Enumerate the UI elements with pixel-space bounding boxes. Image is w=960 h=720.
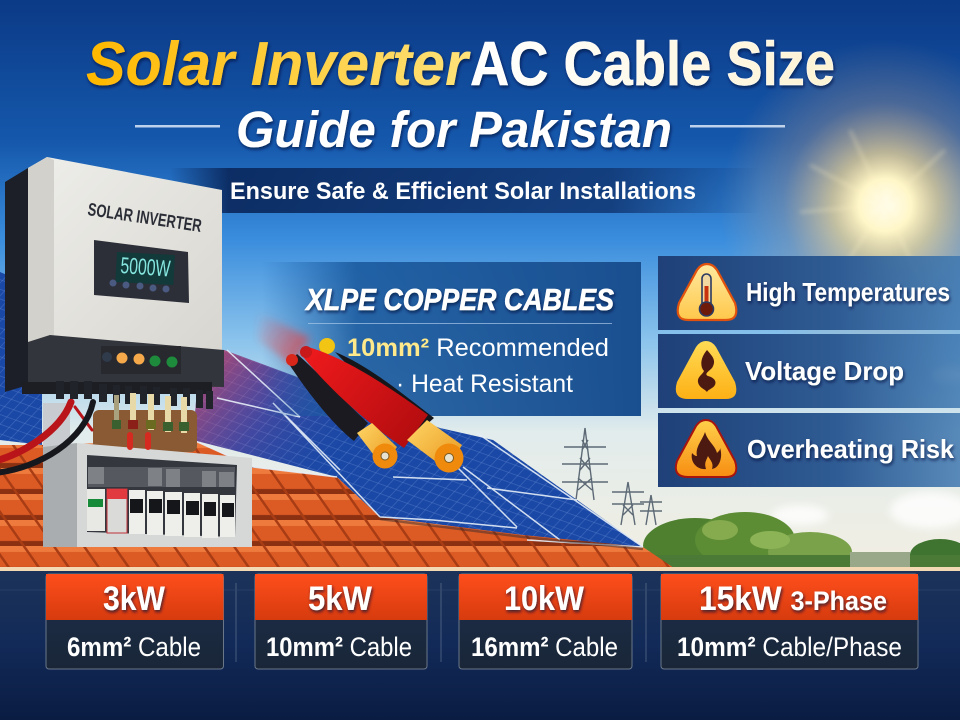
card: 5kW — [255, 574, 427, 669]
breaker panel — [43, 443, 252, 547]
capacity cards — [46, 574, 918, 669]
icon: fire warning — [676, 420, 736, 477]
card: 3kW: 3kW — [103, 580, 166, 618]
card: 10kW: 16mm² Cable — [471, 632, 618, 662]
title: AC Cable Size — [470, 30, 835, 99]
panel: XLPE copper cables — [262, 262, 641, 416]
sky background — [0, 0, 960, 570]
icon: voltage warning — [676, 341, 736, 399]
power pylons — [562, 428, 662, 525]
inverter side — [5, 168, 28, 392]
icon: XLPE cable pair — [258, 312, 464, 472]
card: 15kW 3-phase: 10mm² Cable/Phase — [677, 632, 902, 662]
tagline banner: Ensure Safe & Efficient Solar Installations — [230, 178, 696, 205]
card: 10kW: 10kW — [504, 580, 585, 618]
risk: overheating: Overheating Risk — [747, 434, 955, 464]
display: 5000W — [120, 252, 172, 281]
panel: risks — [658, 256, 960, 487]
risk: high temperatures — [658, 256, 960, 330]
heading: XLPE: XLPE COPPER CABLES — [304, 282, 614, 317]
card: 3kW — [46, 574, 224, 669]
icon: thermometer warning — [678, 264, 736, 320]
card: 15kW 3-phase: 15kW 3-Phase — [699, 580, 887, 618]
breakers — [87, 489, 235, 538]
inverter label: SOLAR INVERTER — [86, 199, 203, 236]
spec: recommended size: 10mm² Recommended — [347, 334, 609, 362]
title — [86, 30, 835, 99]
subtitle: Guide for Pakistan — [236, 101, 672, 158]
risk: overheating — [658, 413, 960, 487]
inverter face — [28, 157, 222, 350]
clouds — [772, 367, 960, 528]
roof with tiles — [0, 440, 680, 572]
solar panels — [0, 272, 643, 549]
terminals and fuses — [22, 381, 213, 433]
risk: voltage drop: Voltage Drop — [745, 356, 904, 386]
AC cables to breaker — [0, 402, 148, 473]
ground band — [0, 570, 960, 720]
risk: voltage drop — [658, 334, 960, 408]
control strip — [28, 335, 224, 387]
card: 5kW: 5kW — [308, 580, 373, 618]
card: 3kW: 6mm² Cable — [67, 632, 201, 662]
trees — [640, 512, 960, 574]
breaker box backing and conduit — [43, 403, 197, 473]
card: 15kW 3-phase — [661, 574, 918, 669]
card: 5kW: 10mm² Cable — [266, 632, 412, 662]
solar inverter — [5, 157, 224, 433]
title: Solar Inverter — [86, 30, 471, 99]
sun — [720, 40, 960, 370]
spec: heat resistant: · Heat Resistant — [396, 370, 573, 398]
tagline banner — [170, 168, 760, 213]
card: 10kW — [459, 574, 632, 669]
display — [94, 240, 189, 303]
